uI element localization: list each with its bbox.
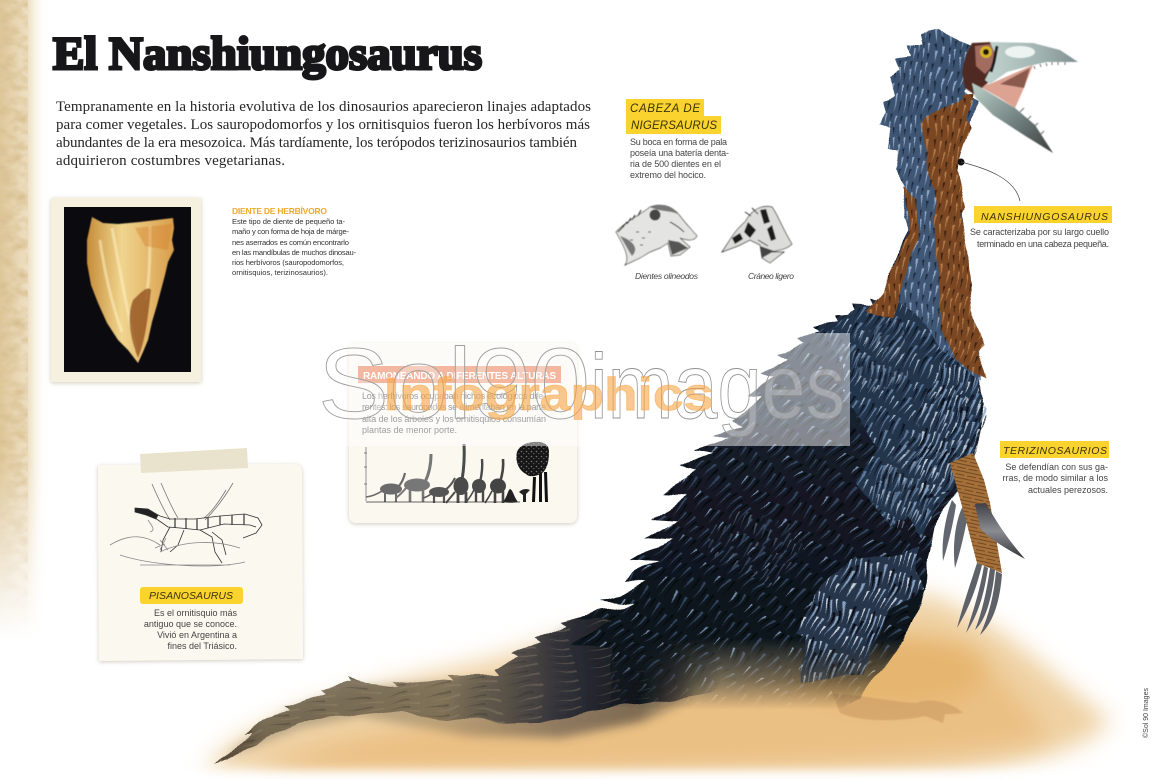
text block: nanshiungosaurus: Se caracterizaba por su largo cuello xyxy=(970,227,1109,237)
illustration: Nanshiungosaurus xyxy=(217,30,1078,762)
text block: diente de herbivoro: Este tipo de diente de pequeño ta- xyxy=(232,217,345,226)
icon: herbivore tooth xyxy=(87,217,174,363)
tape xyxy=(140,448,248,473)
intro paragraph: abundantes de la era mesozoica. Más tardíamente, los terópodos terizinosaurios también xyxy=(56,135,578,151)
text block: pisanosaurus: Es el ornitisquio más xyxy=(154,608,237,618)
text block: diente de herbivoro: maño y con forma de hoja de márge- xyxy=(232,227,349,236)
caption: craneo: Cráneo ligero xyxy=(748,271,794,281)
intro paragraph: para comer vegetales. Los sauropodomorfos y los ornitisquios fueron los herbívoros más xyxy=(56,117,590,133)
text block: nigersaurus: Su boca en forma de pala xyxy=(630,137,727,147)
text block: terizinosaurios: actuales perezosos. xyxy=(1028,485,1108,495)
text block: diente de herbivoro: ornitisquios, terizinosaurios). xyxy=(232,268,328,277)
haunch xyxy=(700,512,805,585)
text block: pisanosaurus: antiguo que se conoce. xyxy=(144,619,237,629)
label: nanshiungosaurus: NANSHIUNGOSAURUS xyxy=(981,211,1108,223)
text block: nigersaurus: ria de 500 dientes en el xyxy=(630,159,721,169)
text block: diente de herbivoro: rios herbívoros (sauropodomorfos, xyxy=(232,258,344,267)
intro paragraph: Tempranamente en la historia evolutiva de los dinosaurios aparecieron linajes adaptados xyxy=(56,99,591,115)
text block: diente de herbivoro: DIENTE DE HERBÍVORO xyxy=(232,206,327,216)
text block: diente de herbivoro: en las mandíbulas de muchos dinosau- xyxy=(232,248,356,257)
text block: diente de herbivoro xyxy=(232,206,356,277)
text block: nanshiungosaurus: terminado en una cabeza pequeña. xyxy=(977,239,1109,249)
intro paragraph: adquirieron costumbres vegetarianas. xyxy=(56,153,285,169)
text block: alta de los árboles y los ornitisquios consumían xyxy=(362,414,546,424)
thigh feathers xyxy=(796,548,924,680)
text block: nigersaurus: poseía una batería denta- xyxy=(630,148,729,158)
callout line: neck xyxy=(958,158,1020,201)
left paper edge strip xyxy=(0,0,40,626)
tail xyxy=(217,600,720,762)
watermark: Sol90 xyxy=(318,328,590,440)
neck xyxy=(866,30,990,378)
text block: Los herbívoros ocupaban nichos ecológicos dife- xyxy=(362,391,546,401)
text block: terizinosaurios: Se defendían con sus ga- xyxy=(1005,462,1108,472)
credit: ©Sol 90 Images xyxy=(1142,688,1150,738)
text block: pisanosaurus: Vivió en Argentina a xyxy=(157,630,237,640)
heading banner: RAMONEANDO A DIFERENTES ALTURAS xyxy=(363,371,556,382)
watermark: images xyxy=(590,336,845,438)
eye xyxy=(980,46,992,58)
icon: pisanosaurus sketch xyxy=(110,483,262,566)
title: El Nanshiungosaurus xyxy=(53,28,482,80)
brown stripes xyxy=(925,92,990,378)
crest xyxy=(884,30,976,135)
label: nanshiungosaurus xyxy=(974,206,1112,223)
text block: nanshiungosaurus xyxy=(970,227,1109,249)
text block: plantas de menor porte. xyxy=(362,425,457,435)
text block: terizinosaurios xyxy=(1002,462,1108,495)
watermark: Infographics xyxy=(384,368,714,420)
text block xyxy=(362,391,546,435)
text block: rentes: los saurópodos se alimentaban en la parte xyxy=(362,402,546,412)
label: cabeza de nigersaurus: CABEZA DE xyxy=(630,103,700,115)
panel: tooth photo xyxy=(51,198,201,382)
caption: dientes: Dientes olineodos xyxy=(635,271,699,281)
text block: pisanosaurus: fines del Triásico. xyxy=(167,641,237,651)
lower jaw xyxy=(972,83,1053,153)
foot xyxy=(833,694,963,723)
text block: nigersaurus: extremo del hocico. xyxy=(630,170,706,180)
text block: diente de herbivoro: nes aserrados es común encontrarlo xyxy=(232,238,349,247)
head xyxy=(962,42,1078,153)
heading banner xyxy=(358,366,561,383)
chart: size comparison silhouettes xyxy=(364,442,549,503)
face xyxy=(962,42,997,95)
icon: nigersaurus head sketch xyxy=(616,205,697,265)
icon: nigersaurus skull sketch xyxy=(722,206,792,263)
label: terizinosaurios xyxy=(1000,441,1109,458)
mouth xyxy=(977,65,1033,108)
panel: pisanosaurus card xyxy=(98,448,303,661)
intro paragraph xyxy=(56,99,591,169)
shoulder feathers xyxy=(822,300,986,540)
watermark xyxy=(318,328,850,446)
text block: nigersaurus xyxy=(630,137,729,180)
sand ground xyxy=(150,595,1150,779)
panel: ramoneando card xyxy=(349,343,577,523)
label: cabeza de nigersaurus xyxy=(626,99,721,134)
label: pisanosaurus: PISANOSAURUS xyxy=(149,590,233,602)
label: cabeza de nigersaurus: NIGERSAURUS xyxy=(631,120,717,132)
upper beak xyxy=(985,42,1078,84)
label: terizinosaurios: TERIZINOSAURIOS xyxy=(1003,445,1107,457)
text block: pisanosaurus xyxy=(144,608,237,651)
body xyxy=(575,230,985,712)
arm and claws xyxy=(943,453,1025,635)
label: pisanosaurus xyxy=(140,587,243,604)
text block: terizinosaurios: rras, de modo similar a los xyxy=(1002,473,1108,483)
